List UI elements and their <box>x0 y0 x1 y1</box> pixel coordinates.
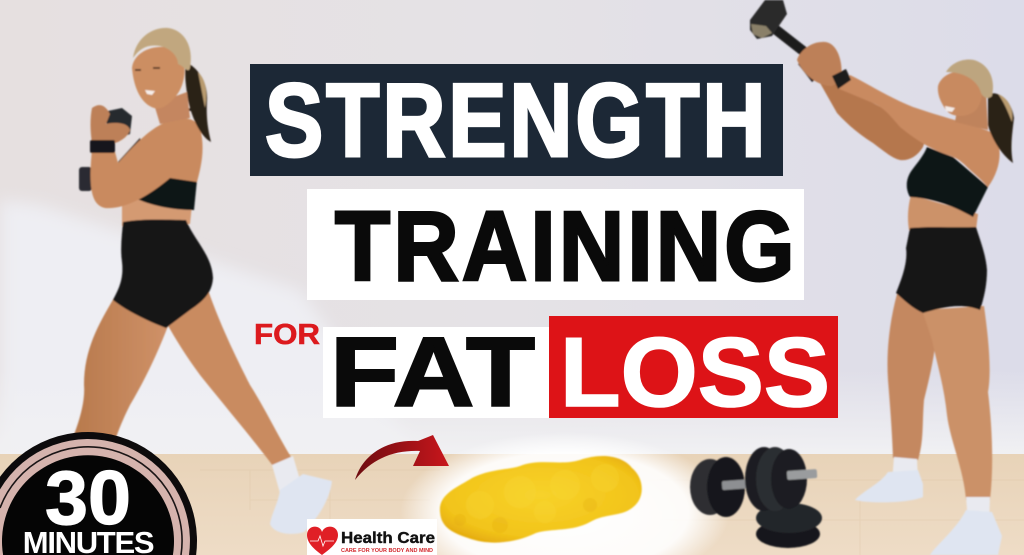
hands <box>90 105 130 145</box>
watch <box>90 140 115 153</box>
headline: for fat loss <box>254 316 838 427</box>
logo tagline: CARE FOR YOUR BODY AND MIND <box>341 548 433 554</box>
chest bra piece <box>118 138 150 182</box>
bar end <box>787 469 817 480</box>
shoe <box>270 474 332 534</box>
fat text: FAT <box>330 317 535 427</box>
stacked plate top <box>756 503 822 533</box>
health care logo <box>307 519 437 555</box>
loss box <box>549 316 838 418</box>
headline: training <box>307 189 804 301</box>
right woman figure <box>750 0 1014 555</box>
dumbbells <box>690 447 822 548</box>
near shoe <box>930 510 1002 555</box>
smile <box>145 90 155 95</box>
near sock <box>966 497 990 524</box>
fat lumps <box>466 464 619 523</box>
left plate front <box>707 457 745 517</box>
hands <box>797 42 842 86</box>
front leg <box>60 298 168 470</box>
strength box <box>250 64 783 176</box>
dumbbell head face <box>751 24 772 38</box>
ponytail highlight <box>998 94 1012 122</box>
inner disc <box>2 455 174 555</box>
fat box <box>323 327 549 418</box>
neck <box>154 92 190 124</box>
headline: strength <box>250 63 783 179</box>
number 30: 30 <box>45 456 131 541</box>
neck <box>955 92 988 130</box>
near leg <box>922 306 992 500</box>
shorts <box>896 227 987 313</box>
far shoe <box>855 470 923 502</box>
watch <box>832 69 851 89</box>
loss text: LOSS <box>560 317 830 427</box>
stacked plate bottom <box>756 520 820 548</box>
fat blob <box>440 456 642 543</box>
ponytail <box>988 93 1014 163</box>
right plate back <box>745 447 783 511</box>
shorts <box>113 220 213 328</box>
hair <box>946 60 993 98</box>
fat shadows <box>454 498 597 533</box>
near arm and shoulder <box>837 75 1000 187</box>
outer black ring <box>0 432 197 555</box>
ponytail highlight <box>198 72 206 108</box>
far arm <box>820 83 930 160</box>
lower dumbbell <box>79 167 92 191</box>
midriff <box>908 195 978 230</box>
dumbbell weapon <box>750 0 820 82</box>
ponytail <box>185 62 211 142</box>
face <box>132 47 185 108</box>
left woman figure <box>60 28 332 534</box>
smile <box>945 106 955 112</box>
training box <box>307 189 804 300</box>
strength text: STRENGTH <box>265 63 768 179</box>
training text: TRAINING <box>335 192 798 301</box>
heartbeat line <box>310 536 334 546</box>
wall light patch <box>0 200 420 456</box>
upper dumbbell <box>103 108 132 140</box>
midriff <box>122 196 192 226</box>
icon: heart <box>307 527 338 555</box>
face <box>938 71 982 116</box>
wall bottom brightening <box>0 370 1024 456</box>
sports bra <box>907 147 988 217</box>
30 minutes badge <box>0 432 197 555</box>
logo title: Health Care <box>341 530 435 547</box>
rear leg <box>166 290 293 466</box>
right plate middle <box>756 447 794 511</box>
hair <box>133 28 191 70</box>
fat shape <box>440 456 642 543</box>
dumbbell handle <box>772 25 810 58</box>
dumbbell lower end <box>798 60 820 82</box>
thin ring <box>0 447 182 555</box>
sports bra <box>135 177 197 210</box>
far sock <box>892 457 918 482</box>
bra strap <box>162 109 198 122</box>
pink ring <box>0 439 190 555</box>
for label: FOR <box>254 319 320 351</box>
right plate front <box>771 449 807 509</box>
arm and back <box>91 118 203 208</box>
far leg <box>887 294 936 460</box>
logo background <box>307 519 437 555</box>
dumbbell head <box>750 0 787 39</box>
bar <box>722 479 754 490</box>
left plates back <box>690 459 730 515</box>
bright glow behind fat <box>400 432 730 555</box>
sock <box>272 456 303 500</box>
wooden floor <box>0 454 1024 555</box>
eyes <box>135 68 160 70</box>
red curved arrow <box>355 435 449 480</box>
